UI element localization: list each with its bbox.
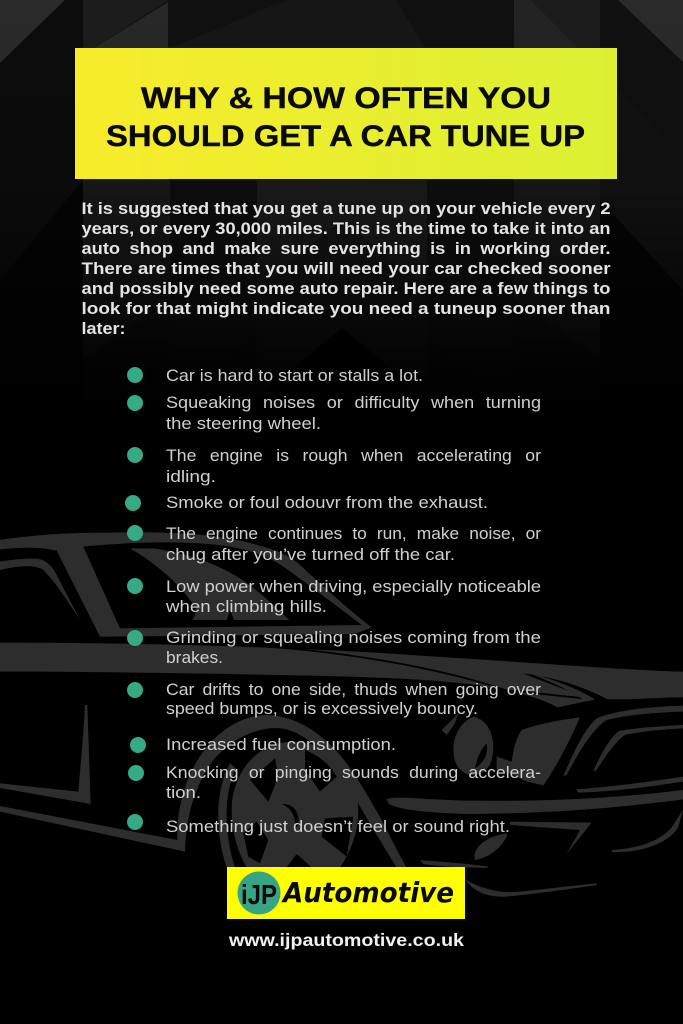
item: engine continues: The engine continues to run, make noise, or [166,525,542,543]
car roof and windshield frame [0,532,372,637]
title: SHOULD GET A CAR TUNE UP [106,120,585,153]
item: rough engine: The engine is rough when accelerating or [166,447,542,465]
item: something not right: Something just doesn’t feel or sound right. [166,818,510,836]
car door line [0,705,91,804]
hood highlight gap [240,645,600,700]
item: rough engine: idling. [166,468,216,486]
intro paragraph [82,199,611,338]
item: car drifts: speed bumps, or is excessively bouncy. [166,700,478,718]
logo [227,867,465,919]
item: grinding [127,629,541,667]
car windshield reflection [130,548,289,620]
item: something not right [127,814,510,836]
item: squeaking noises: Squeaking noises or difficulty when turning [166,394,541,412]
item: engine continues: chug after you’ve turned off the car. [166,546,455,564]
checklist [125,367,542,836]
background: chevron pattern [0,0,683,410]
item: smoke: Smoke or foul odouvr from the exhaust. [166,494,488,512]
item: car drifts: Car drifts to one side, thuds when going over [166,681,542,699]
car sill and wheel arch [0,715,410,873]
car grille [563,706,683,776]
item: knocking: Knocking or pinging sounds during accelera- [166,764,541,782]
item: low power [127,578,541,616]
wheel hub swirl [282,804,299,828]
item: grinding: brakes. [166,649,223,667]
item: fuel consumption: Increased fuel consumption. [166,736,396,754]
title [106,82,585,153]
item: low power: Low power when driving, especially noticeable [166,578,541,596]
intro paragraph: There are times that you will need your car checked sooner [82,259,611,278]
intro paragraph: years, or every 30,000 miles. This is the time to take it into an [82,219,610,238]
item: knocking [128,764,541,802]
intro paragraph: look for that might indicate you need a tuneup sooner than [82,299,610,318]
website url: www.ijpautomotive.co.uk [228,930,464,950]
car hood band [0,643,683,707]
item: rough engine [127,447,542,486]
background: car silhouette [0,532,683,897]
car wheel [232,742,358,867]
car fender and grille lines [530,673,595,702]
item: squeaking noises: the steering wheel. [166,415,321,433]
item: hard to start: Car is hard to start or stalls a lot. [166,367,423,385]
car tyre arc [218,763,236,867]
car headlight left [453,717,493,775]
car bumper [387,790,683,814]
logo wordmark: Automotive [281,876,454,909]
logo badge [238,872,280,914]
item: engine continues [127,525,542,564]
car headlight right [497,717,580,785]
intro paragraph: It is suggested that you get a tune up on your vehicle every 2 [82,199,610,218]
item: car drifts [127,681,542,718]
intro paragraph: and possibly need some auto repair. Here are a few things to [82,279,610,298]
item: grinding: Grinding or squealing noises coming from the [166,629,541,647]
title: WHY & HOW OFTEN YOU [141,82,551,115]
item: low power: when climbing hills. [165,598,327,616]
item: squeaking noises [127,394,541,433]
title banner [75,48,617,179]
car side window trim [0,559,80,620]
item: knocking: tion. [166,784,201,802]
intro paragraph: later: [82,319,126,338]
intro paragraph: auto shop and make sure everything is in working order. [82,239,610,258]
car fog light and lower bumper [474,833,507,860]
logo badge: iJP [241,879,277,910]
